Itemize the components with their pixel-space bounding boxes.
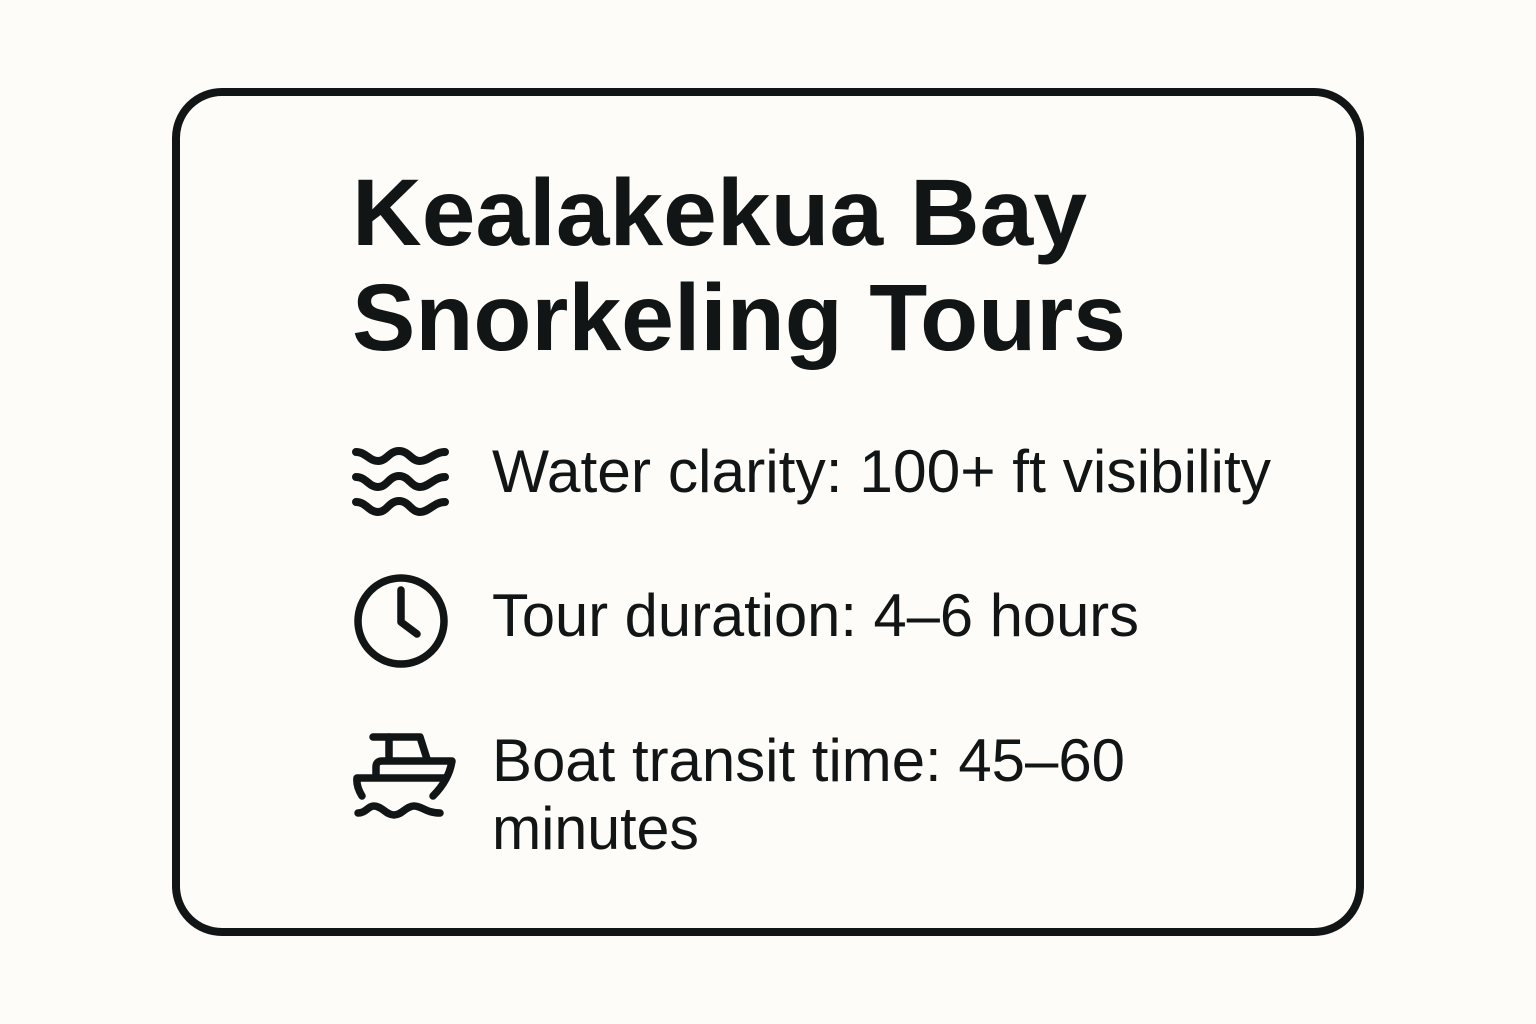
icon: water waves — [356, 451, 445, 512]
text: tour duration: Tour duration: 4–6 hours — [492, 582, 1139, 649]
text: boat transit time — [492, 727, 1125, 862]
icon: clock — [358, 578, 444, 664]
icon: boat — [357, 737, 452, 815]
text: boat transit time: minutes — [492, 795, 699, 862]
title — [352, 160, 1126, 371]
panel: card outline — [176, 92, 1360, 932]
title: Snorkeling Tours — [352, 265, 1126, 371]
text: boat transit time: Boat transit time: 45–60 — [492, 727, 1125, 794]
title: Kealakekua Bay — [352, 160, 1087, 266]
text: water clarity: Water clarity: 100+ ft visibility — [492, 438, 1271, 505]
